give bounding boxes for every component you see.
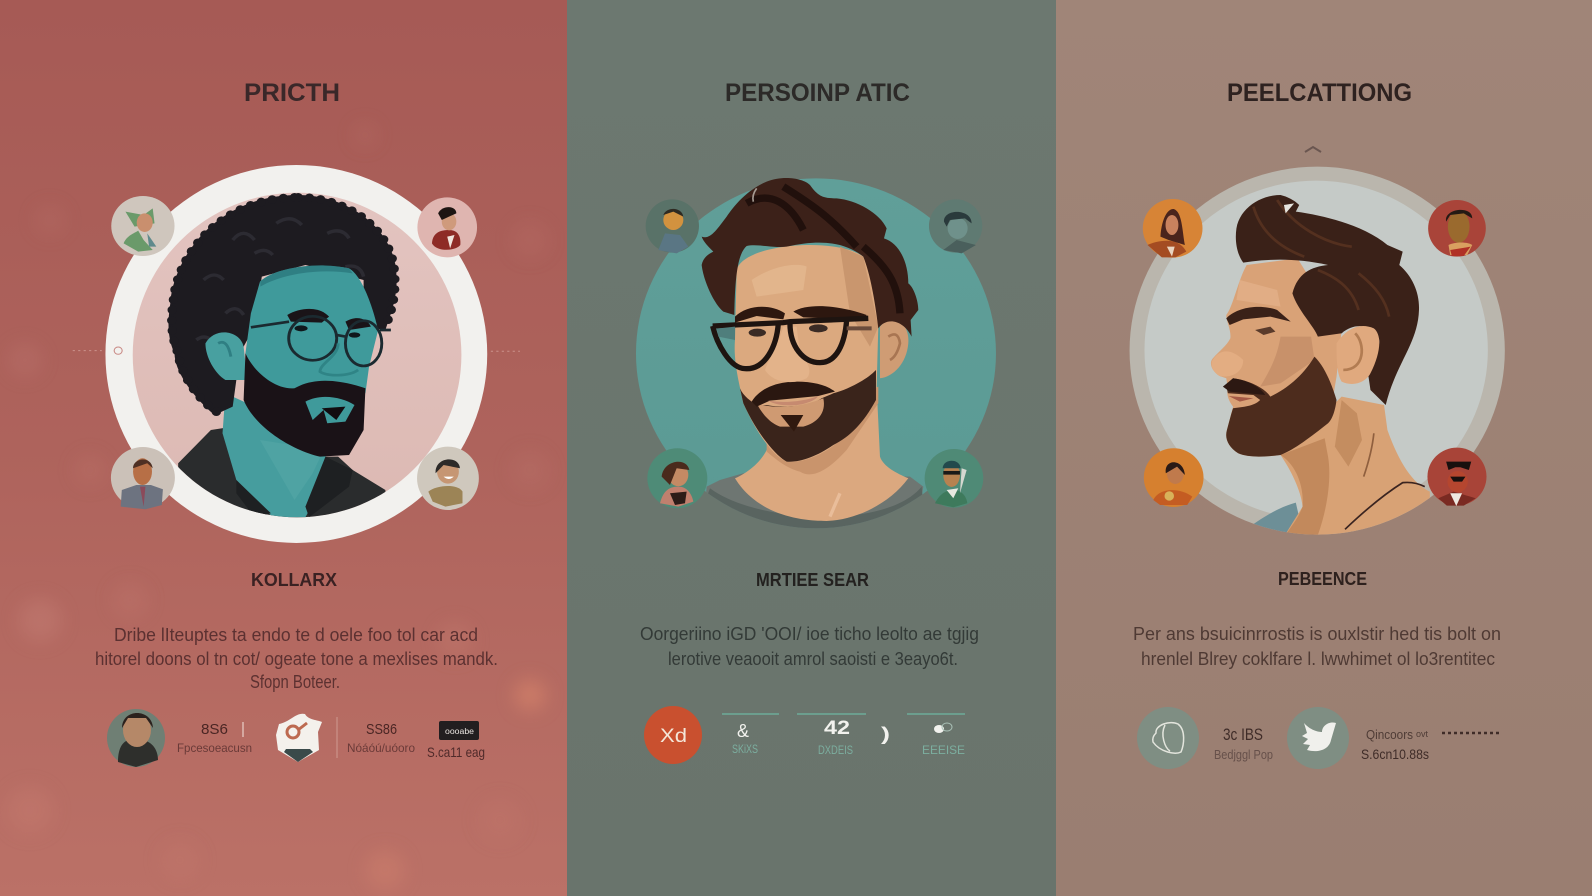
subheading: KOLLARX bbox=[251, 570, 337, 590]
stats row: SKiXS bbox=[732, 742, 758, 756]
stats row: Bedjggl Pop bbox=[1214, 747, 1273, 762]
stats row: S.ca11 eag bbox=[427, 744, 485, 760]
stats row: & bbox=[737, 721, 749, 741]
description: Dribe lIteuptes ta endo te d oele foo tol car acd bbox=[114, 625, 478, 645]
stats row: oooabe bbox=[445, 727, 475, 736]
stats row: 42 bbox=[824, 718, 850, 739]
avatar: man in grey suit bbox=[111, 447, 175, 509]
title: PRICTH bbox=[244, 79, 340, 107]
title: PEELCATTIONG bbox=[1227, 79, 1412, 107]
stats row: EEEISE bbox=[922, 743, 965, 757]
avatar: red jacket bbox=[417, 197, 477, 257]
stats row bbox=[644, 706, 965, 764]
panel: right persona bbox=[1056, 0, 1592, 896]
avatar: yellow-faced man bbox=[646, 199, 699, 253]
description bbox=[95, 625, 498, 692]
description bbox=[1133, 624, 1501, 669]
avatar: bearded man on red bbox=[1428, 200, 1486, 257]
stats row: Nóáóú/uóoro bbox=[347, 741, 415, 755]
portrait: man in profile bbox=[1130, 167, 1505, 540]
avatar: man with sunglasses on red bbox=[1427, 448, 1487, 506]
avatar: woman long hair bbox=[1143, 199, 1203, 258]
stats row: 8S6 bbox=[201, 721, 228, 738]
stats row bbox=[1137, 707, 1500, 769]
avatar: smiling woman bbox=[417, 447, 479, 510]
avatar: woman on orange bbox=[1144, 448, 1204, 507]
description: hrenlel Blrey coklfare l. lwwhimet ol lo3rentitec bbox=[1141, 649, 1495, 669]
stats row: Qincoors bbox=[1366, 727, 1413, 742]
stats row: SS86 bbox=[366, 721, 397, 738]
stats row: ) bbox=[881, 724, 890, 744]
stats row bbox=[107, 709, 485, 767]
panel: left persona bbox=[0, 0, 567, 896]
icon: chevron bbox=[1305, 147, 1321, 152]
portrait: man with glasses bbox=[636, 178, 996, 540]
avatar: muted man bbox=[929, 199, 982, 253]
avatar: green hooded woman bbox=[111, 196, 175, 256]
subheading: PEBEENCE bbox=[1278, 569, 1367, 589]
description: lerotive veaooit amrol saoisti e 3eayo6t. bbox=[668, 649, 958, 669]
stats row: Xd bbox=[660, 726, 687, 747]
description: Sfopn Boteer. bbox=[250, 672, 340, 692]
subheading: MRTIEE SEAR bbox=[756, 570, 869, 590]
stats row: ovt bbox=[1416, 729, 1429, 739]
description: Per ans bsuicinrrostis is ouxlstir hed tis bolt on bbox=[1133, 624, 1501, 644]
stats row: Fpcesoeacusn bbox=[177, 741, 252, 755]
stats row: 3c IBS bbox=[1223, 725, 1263, 744]
avatar: man in sunglasses bbox=[925, 449, 983, 508]
avatar: woman with red scarf bbox=[647, 448, 707, 508]
description: hitorel doons ol tn cot/ ogeate tone a mexlises mandk. bbox=[95, 649, 498, 669]
stats row: S.6cn10.88s bbox=[1361, 746, 1429, 762]
icon: bird bbox=[1302, 722, 1336, 751]
description: Oorgeriino iGD 'OOI/ ioe ticho leolto ae tgjig bbox=[640, 624, 979, 644]
description bbox=[640, 624, 979, 669]
title: PERSOINP ATIC bbox=[725, 79, 910, 107]
panel: middle persona bbox=[567, 0, 1056, 896]
stats row: DXDEIS bbox=[818, 743, 853, 757]
portrait: curly hair man bbox=[73, 165, 520, 543]
